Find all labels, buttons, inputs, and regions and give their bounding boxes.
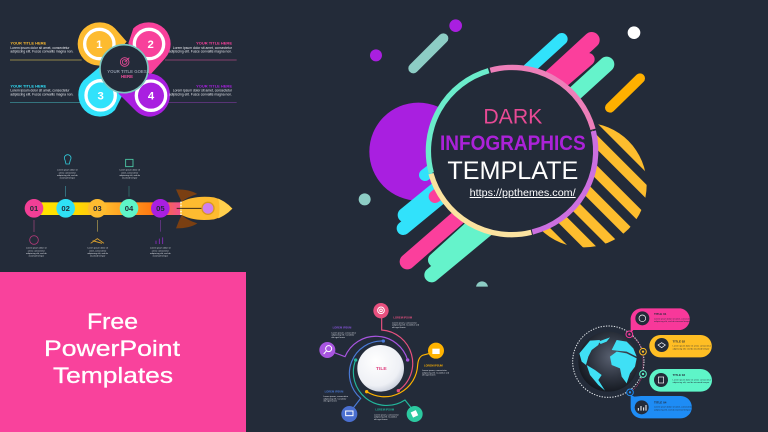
node captions: adipiscing elit. Curabitur — [331, 334, 355, 337]
pill 2: TITLE 02 — [673, 339, 685, 343]
timeline captions: eiusmod tempor — [60, 177, 75, 180]
panel: free powerpoint templates — [0, 272, 246, 432]
pill 3: Lorem ipsum dolor sit amet, consectetur — [673, 378, 711, 381]
timeline captions: amet, consectetur — [152, 249, 169, 252]
node captions: elit eget lorem — [422, 374, 436, 377]
timeline captions: amet, consectetur — [59, 171, 76, 174]
step markers: 03 — [93, 204, 102, 213]
pill 1: adipiscing elit, sed do eiusmod tempor — [654, 320, 691, 323]
purple circle — [369, 103, 467, 201]
timeline captions — [26, 169, 171, 258]
text blocks — [10, 40, 233, 96]
pill 3 — [649, 369, 712, 392]
pill 4 — [631, 395, 693, 418]
title text: DARK — [483, 105, 542, 128]
text blocks: adipiscing elit. Fusce convallis magna non. — [169, 92, 232, 96]
petal 4: 4 — [148, 91, 155, 103]
timeline captions: adipiscing elit, sed do — [26, 252, 47, 255]
petal 2 — [128, 22, 171, 75]
timeline captions: Lorem ipsum dolor sit — [57, 169, 78, 172]
pill 1: TITLE 01 — [654, 312, 667, 316]
node captions: elit eget lorem — [331, 336, 345, 339]
timeline captions: amet, consectetur — [89, 249, 107, 252]
diagonal pills lower left — [403, 158, 490, 275]
step markers: 05 — [156, 204, 165, 213]
text blocks: YOUR TITLE HERE — [10, 83, 47, 88]
timeline captions: Lorem ipsum dolor sit — [87, 247, 108, 250]
node captions: LOREM IPSUM — [375, 408, 395, 412]
title text: INFOGRAPHICS — [440, 132, 586, 155]
panel: free powerpoint templates: PowerPoint — [44, 336, 180, 361]
timeline captions: eiusmod tempor — [122, 177, 138, 180]
timeline captions: eiusmod tempor — [29, 255, 44, 258]
text blocks: Lorem ipsum dolor sit amet, consectetur — [173, 46, 233, 50]
timeline captions: adipiscing elit, sed do — [150, 252, 171, 255]
pill 4: adipiscing elit, sed do eiusmod tempor — [654, 408, 691, 411]
text blocks: YOUR TITLE HERE — [196, 83, 232, 88]
node captions: Lorem ipsum, consectetur — [422, 369, 447, 372]
text blocks: adipiscing elit. Fusce convallis magna non. — [10, 50, 73, 54]
spiral arcs — [333, 318, 430, 410]
progress bar — [34, 202, 181, 215]
node icons — [319, 303, 444, 422]
node captions: adipiscing elit. Curabitur sed — [392, 324, 420, 327]
center hub — [100, 45, 148, 93]
text blocks: adipiscing elit. Fusce convallis magna non. — [10, 92, 73, 96]
connector lines — [10, 60, 237, 103]
panel: free powerpoint templates: Free — [87, 309, 138, 334]
step markers: 01 — [30, 204, 39, 213]
timeline captions: eiusmod tempor — [90, 255, 106, 258]
pill 2: adipiscing elit, sed do eiusmod tempor — [673, 347, 710, 350]
pill 3: TITLE 03 — [673, 373, 685, 377]
diagonal pills upper right — [413, 38, 640, 110]
timeline captions: adipiscing elit, sed do — [119, 174, 141, 177]
node captions: Lorem ipsum, consectetur — [323, 395, 348, 398]
pill 3: adipiscing elit, sed do eiusmod tempor — [673, 381, 710, 384]
panel: free powerpoint templates: Templates — [53, 363, 173, 388]
step markers — [25, 199, 170, 218]
petal 3: 3 — [98, 90, 104, 102]
decorative dots — [359, 19, 640, 293]
timeline captions: Lorem ipsum dolor sit — [119, 169, 140, 172]
timeline captions: adipiscing elit, sed do — [87, 252, 109, 255]
hero: dark infographics template — [358, 19, 647, 287]
timeline captions: amet, consectetur — [121, 171, 139, 174]
pill 1 — [631, 308, 693, 333]
dotted link — [629, 334, 643, 392]
step markers: 04 — [125, 204, 134, 213]
four step petal infographic — [10, 22, 237, 117]
link nodes — [626, 331, 646, 396]
timeline captions: amet, consectetur — [28, 249, 45, 252]
pill 2 — [649, 335, 712, 357]
node captions: elit eget lorem — [392, 326, 406, 329]
node captions: Lorem ipsum, consectetur — [392, 321, 417, 324]
node captions: Lorem ipsum, consectetur — [331, 331, 356, 334]
text blocks: YOUR TITLE HERE — [10, 40, 47, 45]
node captions: LOREM IPSUM — [333, 325, 352, 329]
circular process infographic — [319, 303, 450, 422]
timeline captions: adipiscing elit, sed do — [57, 174, 78, 177]
globe — [573, 326, 644, 397]
connectors — [34, 186, 160, 232]
step markers: 02 — [61, 204, 70, 213]
node captions: elit eget lorem — [374, 418, 388, 421]
pill 2: Lorem ipsum dolor sit amet, consectetur — [673, 345, 711, 348]
text blocks: Lorem ipsum dolor sit amet, consectetur — [10, 89, 70, 93]
title text: https://ppthemes.com/ — [470, 188, 576, 199]
node captions: LOREM IPSUM — [424, 364, 444, 368]
petal 1 — [78, 22, 127, 66]
rocket timeline infographic — [25, 155, 232, 258]
timeline captions: eiusmod tempor — [153, 255, 168, 258]
striped yellow circle — [542, 124, 647, 248]
pill 4: Lorem ipsum dolor sit amet, consectetur — [654, 406, 693, 409]
globe infographic — [573, 308, 712, 418]
center disc: TILE — [376, 366, 387, 372]
text blocks: YOUR TITLE HERE — [196, 40, 232, 45]
node captions — [323, 316, 450, 421]
node captions: adipiscing elit. Curabitur — [323, 397, 347, 400]
node captions: Lorem ipsum, consectetur — [374, 413, 399, 416]
petal 2: 2 — [148, 39, 154, 51]
pill 1: Lorem ipsum dolor sit amet, consectetur — [654, 317, 693, 320]
node captions: adipiscing elit. Curabitur — [374, 416, 397, 419]
ring — [428, 67, 596, 235]
center hub: HERE — [121, 74, 133, 79]
timeline icons — [30, 155, 163, 244]
timeline captions: Lorem ipsum dolor sit — [26, 247, 47, 250]
center hub: YOUR TITLE GOES — [107, 69, 147, 74]
node captions: elit eget lorem — [323, 400, 337, 403]
title text — [440, 105, 586, 199]
title text: TEMPLATE — [447, 157, 578, 185]
rocket — [176, 189, 232, 228]
node captions: LOREM IPSUM — [325, 389, 344, 393]
petal 3 — [78, 67, 122, 117]
node captions: adipiscing elit. Curabitur sed — [422, 371, 450, 374]
timeline captions: Lorem ipsum dolor sit — [150, 247, 171, 250]
petal 4 — [118, 73, 170, 117]
node captions: LOREM IPSUM — [393, 316, 413, 320]
text blocks: Lorem ipsum dolor sit amet, consectetur — [173, 89, 233, 93]
pill 4: TITLE 04 — [654, 400, 667, 404]
text blocks: Lorem ipsum dolor sit amet, consectetur — [10, 46, 70, 50]
text blocks: adipiscing elit. Fusce convallis magna non. — [169, 50, 232, 54]
petal 1: 1 — [96, 39, 102, 51]
